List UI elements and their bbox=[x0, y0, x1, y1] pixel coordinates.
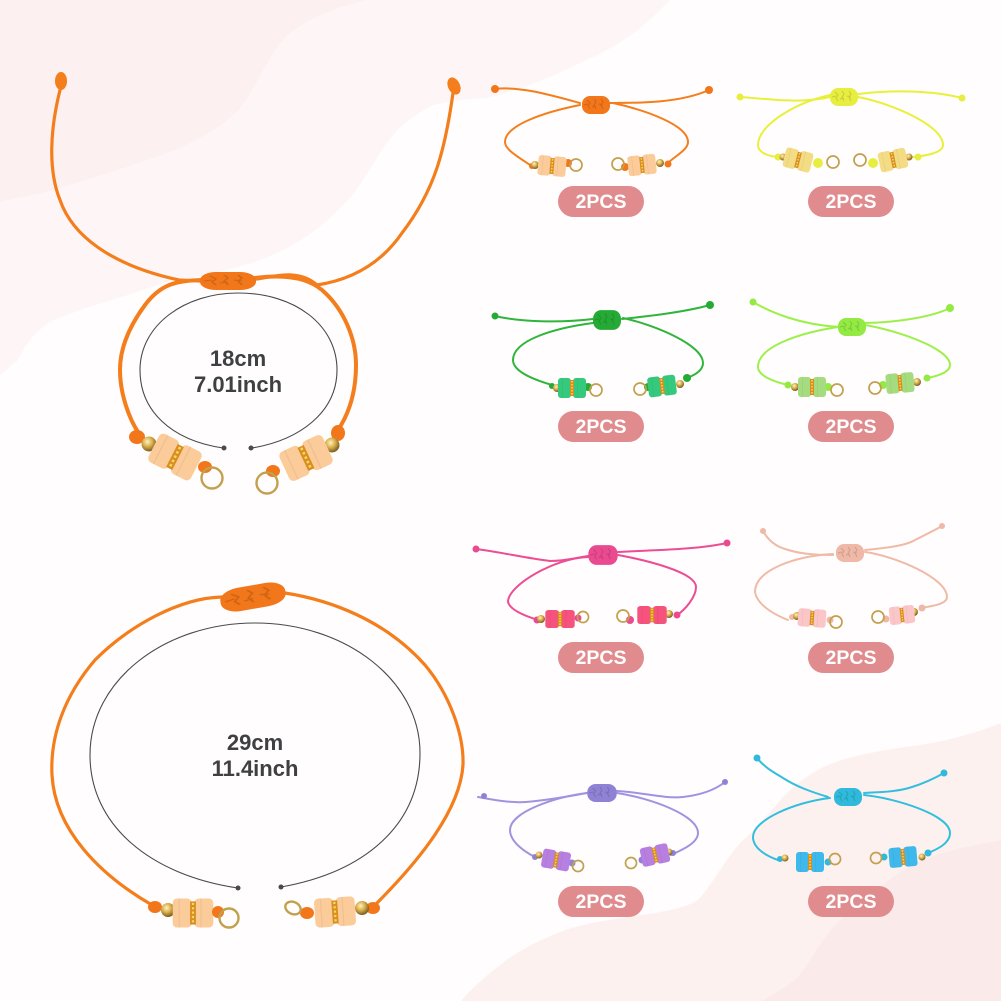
knots and ends bbox=[472, 540, 730, 624]
cords bbox=[476, 543, 727, 620]
quantity pill bbox=[558, 642, 644, 673]
beads bbox=[531, 154, 664, 177]
cords bbox=[753, 758, 950, 860]
quantity pill bbox=[808, 411, 894, 442]
right hardware bbox=[283, 896, 380, 928]
cords bbox=[52, 90, 453, 432]
panel: purple bracelet bbox=[478, 779, 728, 917]
left hardware bbox=[129, 430, 222, 488]
quantity pill: 2PCS bbox=[826, 191, 876, 213]
cords bbox=[740, 91, 962, 157]
cords bbox=[753, 302, 950, 385]
panel: green bracelet bbox=[492, 301, 714, 442]
background wave: darker pink bottom-right bbox=[762, 840, 1001, 1001]
quantity pill bbox=[808, 186, 894, 217]
slide knot bbox=[219, 580, 287, 614]
panel: 29cm bracelet bbox=[52, 580, 463, 928]
arc end dots bbox=[236, 884, 284, 890]
rings bbox=[831, 382, 881, 396]
right hardware bbox=[256, 425, 345, 494]
quantity pill bbox=[808, 886, 894, 917]
quantity pill bbox=[558, 886, 644, 917]
rings bbox=[830, 611, 884, 628]
quantity pill: 2PCS bbox=[576, 416, 626, 438]
quantity pill: 2PCS bbox=[826, 891, 876, 913]
rings bbox=[570, 158, 624, 171]
panel: pink bracelet bbox=[472, 540, 730, 673]
beads bbox=[793, 605, 918, 628]
rings bbox=[578, 610, 629, 622]
arc end dots bbox=[222, 446, 254, 450]
quantity pill: 2PCS bbox=[576, 191, 626, 213]
panel: orange bracelet bbox=[491, 85, 713, 217]
cords bbox=[755, 526, 947, 620]
knots and ends bbox=[736, 88, 966, 168]
size label: 7.01inch bbox=[194, 372, 282, 397]
end knots bbox=[55, 72, 463, 97]
panel: peach bracelet bbox=[755, 523, 947, 673]
quantity pill: 2PCS bbox=[826, 416, 876, 438]
knots and ends bbox=[754, 754, 948, 866]
rings bbox=[590, 383, 646, 396]
knots and ends bbox=[750, 298, 954, 391]
quantity pill: 2PCS bbox=[576, 891, 626, 913]
cords bbox=[478, 782, 725, 857]
quantity pill: 2PCS bbox=[576, 647, 626, 669]
panel: blue bracelet bbox=[753, 754, 950, 917]
cords bbox=[495, 305, 710, 385]
dimension arc bbox=[140, 293, 337, 448]
rings bbox=[572, 858, 636, 872]
beads bbox=[780, 147, 912, 173]
dimension arc bbox=[90, 623, 420, 888]
knots and ends bbox=[760, 523, 945, 624]
beads bbox=[536, 843, 672, 872]
knots and ends bbox=[492, 301, 714, 391]
beads bbox=[782, 846, 926, 872]
beads bbox=[553, 374, 684, 398]
background wave: light pink top bbox=[0, 0, 670, 375]
panel: 18cm bracelet bbox=[52, 72, 463, 494]
knots and ends bbox=[481, 779, 728, 866]
size label: 18cm bbox=[210, 346, 266, 371]
slide knot bbox=[200, 272, 256, 290]
background wave: darker pink top-left bbox=[0, 0, 366, 202]
left hardware bbox=[148, 898, 238, 928]
quantity pill bbox=[558, 186, 644, 217]
beads bbox=[791, 372, 921, 397]
quantity pill bbox=[558, 411, 644, 442]
cord bbox=[52, 593, 463, 905]
size label: 29cm bbox=[227, 730, 283, 755]
panel: yellow bracelet bbox=[736, 88, 966, 217]
knots and ends bbox=[491, 85, 713, 171]
cords bbox=[495, 88, 709, 165]
rings bbox=[830, 852, 882, 864]
rings bbox=[827, 154, 866, 168]
beads bbox=[537, 606, 673, 628]
quantity pill: 2PCS bbox=[826, 647, 876, 669]
background wave: light pink bottom-right bbox=[461, 723, 1001, 1001]
panel: lime bracelet bbox=[750, 298, 954, 442]
quantity pill bbox=[808, 642, 894, 673]
size label: 11.4inch bbox=[212, 756, 298, 781]
